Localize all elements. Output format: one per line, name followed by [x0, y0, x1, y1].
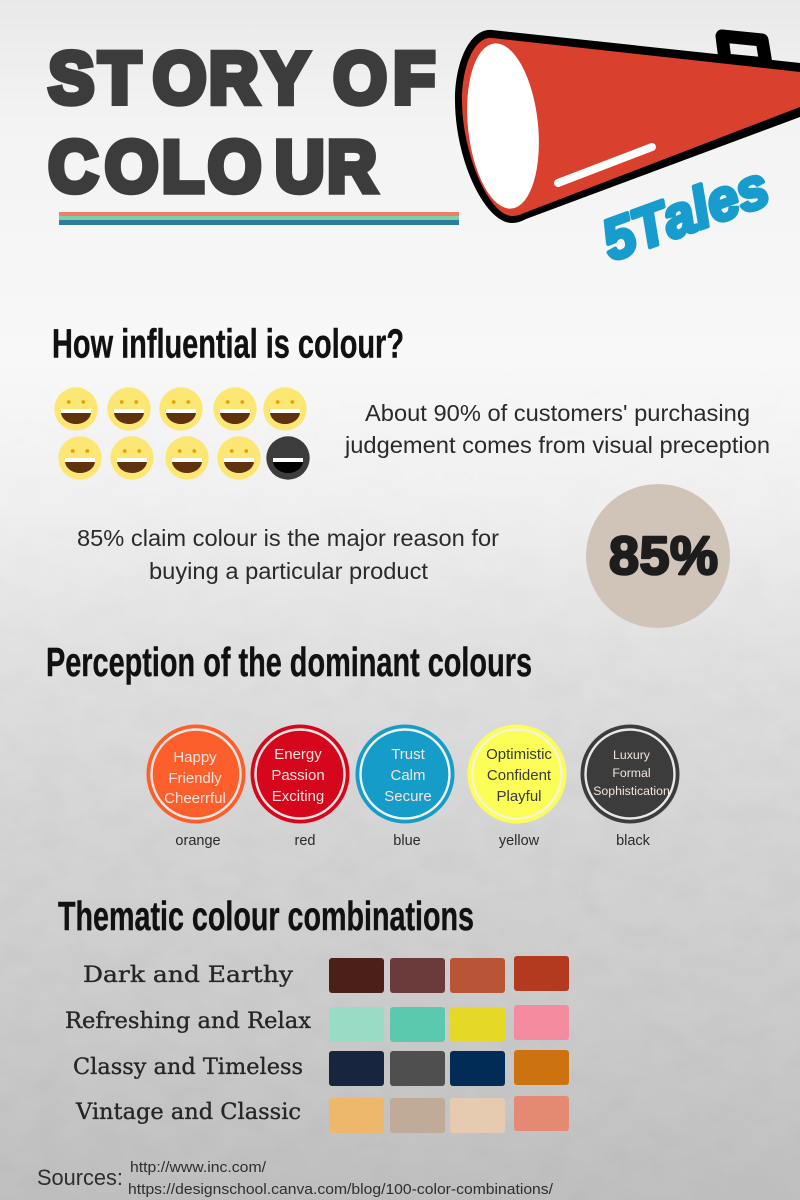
sources: [37, 1159, 554, 1198]
colour circle: yellow: yellow: [499, 833, 540, 849]
badge: 85%: [586, 484, 730, 628]
colour circle: red: Passion: [271, 767, 325, 784]
title: [48, 37, 435, 207]
text: 85 percent statistic: 85% claim colour is the major reason for: [77, 525, 499, 551]
colour circle: black: Sophistication: [593, 784, 670, 798]
colour circle: black: Luxury: [613, 748, 651, 762]
heading: how influential: How influential is colour?: [52, 320, 404, 366]
colour circle: blue: Trust: [391, 746, 426, 763]
colour circle: yellow: Playful: [496, 788, 542, 805]
palette row: dark and earthy: Dark and Earthy: [83, 963, 294, 988]
colour circle: red: [250, 724, 350, 849]
colour circle: red: red: [295, 833, 315, 849]
heading: thematic combinations: Thematic colour combinations: [58, 893, 474, 939]
colour circle: orange: Friendly: [168, 770, 222, 787]
title: STORY OF: [48, 37, 435, 118]
brand: 5Tales: 5Tales: [593, 154, 777, 274]
heading: perception: Perception of the dominant colours: [46, 639, 532, 685]
title: COLOUR: [48, 126, 377, 207]
badge: 85%: 85%: [609, 526, 718, 586]
text: 90 percent statistic: [344, 400, 770, 458]
colour circle: orange: orange: [175, 833, 221, 849]
palette row: vintage and classic: [75, 1096, 569, 1133]
text: 90 percent statistic: About 90% of customers' purchasing: [365, 400, 750, 426]
text: 85 percent statistic: buying a particular product: [149, 558, 428, 584]
colour circle: blue: Calm: [390, 767, 426, 784]
colour circle: red: Energy: [274, 746, 322, 763]
palette row: refreshing and relax: [65, 1005, 569, 1042]
text: 90 percent statistic: judgement comes from visual preception: [344, 432, 770, 458]
icon: megaphone: [455, 30, 800, 223]
colour circle: black: black: [616, 833, 651, 849]
colour circle: red: Exciting: [272, 788, 324, 805]
palette row: refreshing and relax: Refreshing and Relax: [65, 1009, 312, 1034]
palette row: vintage and classic: Vintage and Classic: [75, 1100, 301, 1125]
colour circle: yellow: Optimistic: [486, 746, 552, 763]
colour circle: yellow: [468, 724, 566, 849]
palette row: classy and timeless: [73, 1050, 569, 1086]
palette row: dark and earthy: [83, 956, 569, 993]
colour circle: blue: [356, 724, 454, 849]
sources: Sources:: [37, 1165, 123, 1190]
sources: http://www.inc.com/: [130, 1159, 267, 1176]
title underline stripes: [59, 212, 459, 225]
colour circle: yellow: Confident: [487, 767, 552, 784]
colour circle: orange: Happy: [173, 749, 217, 766]
colour circle: orange: [146, 724, 246, 849]
colour circle: blue: Secure: [384, 788, 432, 805]
colour circle: black: Formal: [612, 766, 651, 780]
colour circle: orange: Cheerrful: [164, 790, 226, 807]
colour circle: black: [580, 724, 680, 849]
text: 85 percent statistic: [77, 525, 499, 584]
colour circle: blue: blue: [393, 833, 421, 849]
icon row: nine of ten smiling faces: [54, 387, 310, 480]
sources: https://designschool.canva.com/blog/100-color-combinations/: [128, 1181, 554, 1198]
palette row: classy and timeless: Classy and Timeless: [73, 1055, 303, 1080]
